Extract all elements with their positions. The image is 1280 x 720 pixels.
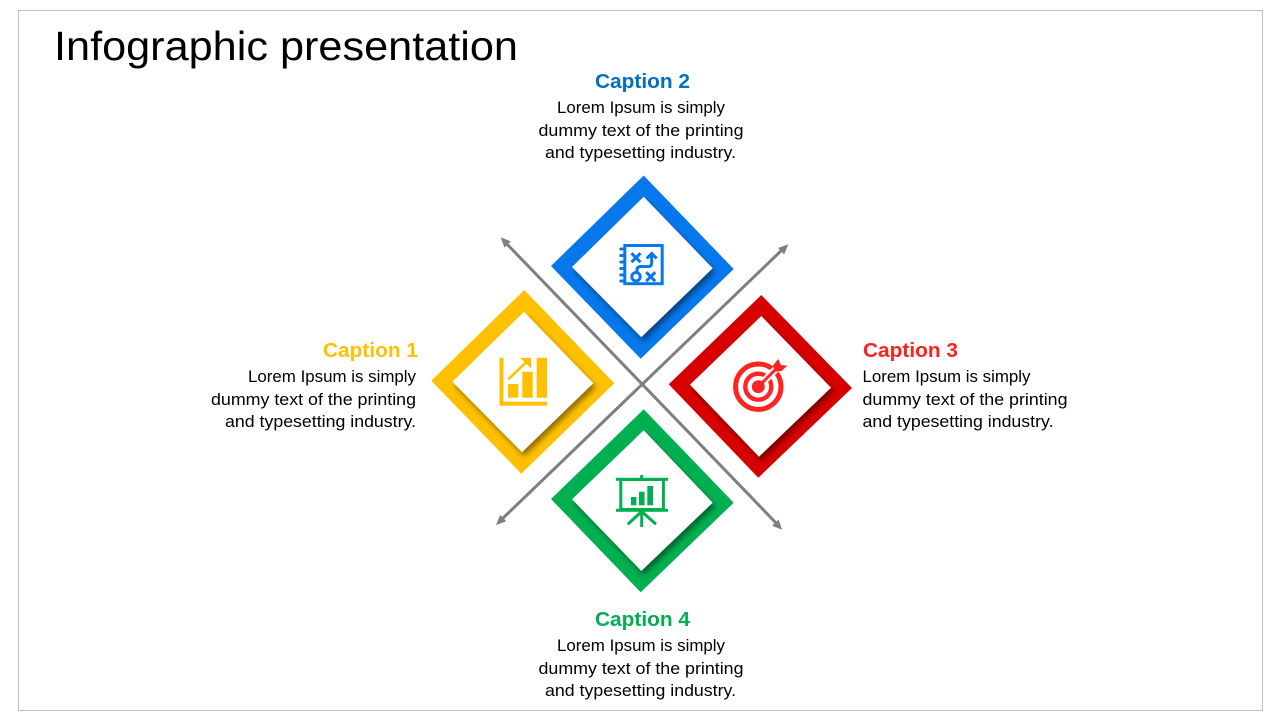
arrow: diagonal top-right to bottom-left	[496, 244, 788, 525]
diamond: green	[551, 409, 734, 592]
text block: caption 1: Lorem Ipsum is simply	[248, 368, 417, 386]
text block: caption 2: Caption 2	[595, 71, 690, 93]
diamond: yellow	[431, 290, 614, 474]
text block: caption 3: Lorem Ipsum is simply	[862, 368, 1031, 386]
icon: target with arrow	[736, 359, 787, 409]
diamond: blue	[551, 176, 734, 359]
text block: caption 3: and typesetting industry.	[862, 413, 1054, 431]
text block: caption 1: and typesetting industry.	[225, 413, 416, 431]
icon: rising bar chart	[500, 358, 547, 406]
text block: caption 2: and typesetting industry.	[545, 144, 736, 162]
text block: caption 2: dummy text of the printing	[538, 122, 744, 140]
text block: caption 3: Caption 3	[863, 340, 958, 362]
text block: caption 4: Lorem Ipsum is simply	[557, 637, 726, 655]
text block: caption 1	[211, 340, 418, 431]
diamond: red	[669, 295, 852, 478]
icon: presentation board	[616, 475, 668, 527]
text block: caption 2	[538, 71, 744, 162]
text block: caption 4	[538, 609, 744, 700]
text block: caption 4: and typesetting industry.	[545, 682, 736, 700]
icon: strategy notebook	[621, 246, 662, 284]
text block: caption 3: dummy text of the printing	[862, 391, 1068, 409]
text block: caption 3	[862, 340, 1068, 431]
text block: caption 1: dummy text of the printing	[211, 391, 416, 409]
arrow: diagonal top-left to bottom-right	[501, 237, 782, 530]
text block: caption 4: dummy text of the printing	[538, 660, 744, 678]
text block: caption 2: Lorem Ipsum is simply	[557, 99, 726, 117]
text block: caption 4: Caption 4	[595, 609, 691, 631]
title: Infographic presentation	[54, 23, 518, 69]
text block: caption 1: Caption 1	[323, 340, 418, 362]
